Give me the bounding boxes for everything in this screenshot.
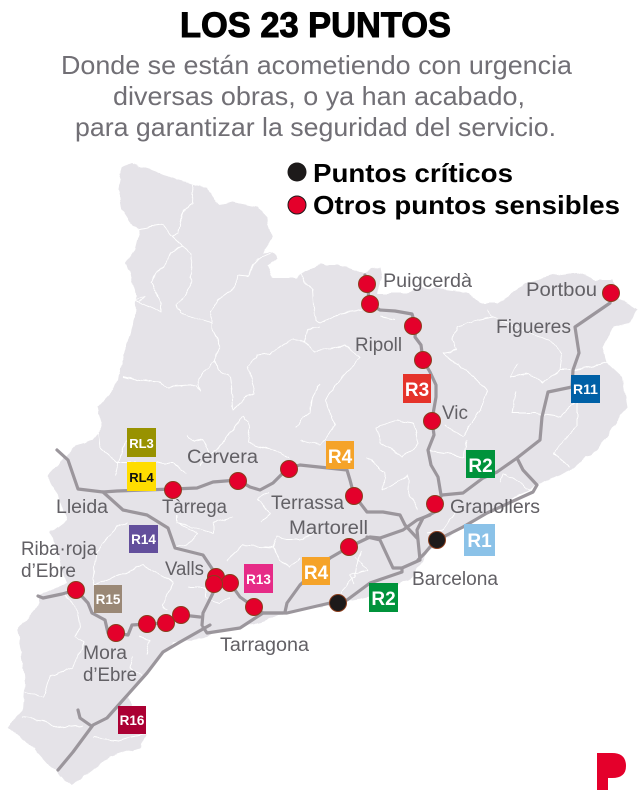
badge R13 — [244, 564, 273, 593]
badge RL3: RL3 — [129, 436, 154, 451]
badge R15 — [94, 585, 122, 613]
badge R11 — [571, 375, 600, 403]
legend: critical points: Puntos críticos — [313, 158, 513, 188]
badge R4 lower — [302, 557, 330, 585]
badge R15: R15 — [96, 592, 121, 607]
line R4 north — [57, 450, 417, 538]
badge R3 — [403, 374, 431, 403]
badge R2 north — [466, 450, 495, 478]
line R13 — [230, 583, 283, 613]
map of Catalonia — [7, 163, 637, 785]
badge R16: R16 — [120, 713, 145, 728]
place labels: Puigcerdà — [383, 271, 472, 292]
place labels: Lleida — [56, 497, 108, 518]
badge R4 lower: R4 — [304, 563, 329, 584]
place labels: Tarragona — [220, 635, 309, 656]
comarca borders — [22, 184, 607, 740]
place labels: Mora — [83, 643, 127, 664]
line R1 coast — [418, 458, 537, 560]
badge R2 south: R2 — [371, 589, 396, 610]
place labels: Granollers — [450, 497, 540, 518]
critical points (black) — [330, 532, 446, 612]
place labels: Martorell — [289, 518, 368, 539]
line R4 south — [285, 515, 430, 612]
badge R2 north: R2 — [468, 456, 493, 477]
territory shape — [7, 163, 637, 785]
subtitle — [61, 50, 573, 142]
badge RL4: RL4 — [129, 470, 155, 485]
place labels: Tàrrega — [162, 497, 227, 518]
legend — [288, 158, 620, 220]
badge R1: R1 — [467, 531, 492, 552]
line R14 — [103, 492, 215, 625]
badge R3: R3 — [405, 380, 429, 401]
railway lines — [38, 275, 613, 770]
icon: newspaper logo P — [597, 753, 626, 790]
place labels: Ripoll — [355, 335, 402, 356]
badge R2 south — [369, 583, 398, 612]
place labels — [21, 271, 597, 686]
subtitle: Donde se están acometiendo con urgencia — [61, 50, 573, 80]
badge R14 — [129, 525, 158, 553]
place labels: Portbou — [526, 280, 597, 301]
line south R16 — [58, 625, 210, 770]
line R2 north and R11 — [435, 286, 613, 504]
subtitle: para garantizar la seguridad del servicio. — [75, 112, 556, 142]
place labels: Valls — [165, 559, 204, 580]
badge R4 upper — [326, 441, 354, 469]
place labels: Vic — [442, 403, 468, 424]
place labels: Figueres — [496, 317, 571, 338]
badge RL3 — [127, 428, 156, 457]
place labels: Terrassa — [271, 493, 344, 514]
badge R16 — [118, 706, 146, 734]
badge R14: R14 — [131, 532, 156, 547]
line into Barcelona — [203, 511, 437, 633]
subtitle: diversas obras, o ya han acabado, — [113, 81, 525, 111]
place labels: Barcelona — [412, 569, 498, 590]
place labels: Cervera — [187, 447, 258, 468]
place labels: d’Ebre — [21, 561, 76, 582]
badge R13: R13 — [246, 572, 271, 587]
sensitive points (red) — [68, 276, 620, 642]
line R3 — [365, 275, 441, 495]
badge R1 — [464, 524, 495, 556]
line R15 — [38, 590, 200, 635]
place labels: d’Ebre — [83, 665, 137, 686]
line badges — [94, 374, 600, 734]
place labels: Riba·roja — [21, 539, 97, 560]
title: LOS 23 PUNTOS — [180, 6, 451, 45]
badge R4 upper: R4 — [328, 447, 353, 468]
badge R11: R11 — [573, 381, 598, 397]
legend: other sensitive points: Otros puntos sensibles — [313, 190, 620, 220]
badge RL4 — [127, 462, 156, 491]
